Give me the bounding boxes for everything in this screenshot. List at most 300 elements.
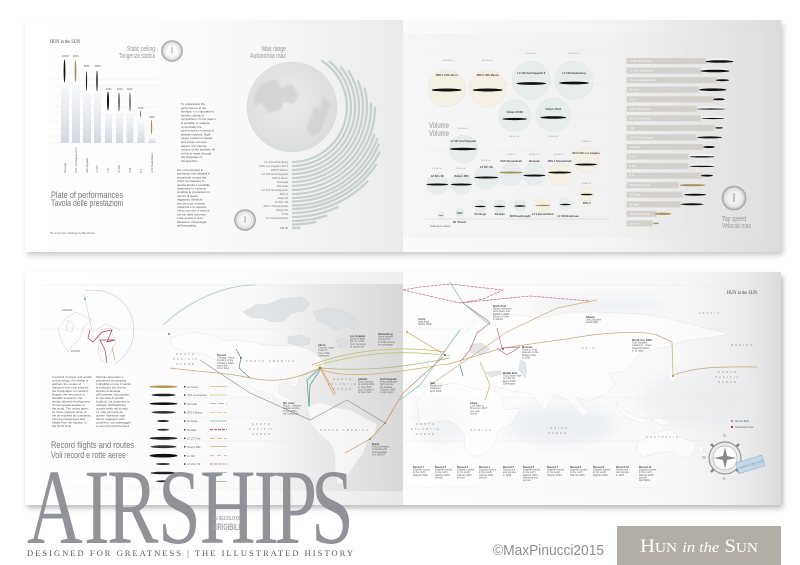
- map captions: in ten days: [217, 367, 230, 370]
- ocean and continent labels: ATLANTIC: [328, 382, 358, 386]
- bottom row of captions: Record 9: [593, 465, 605, 469]
- heading: volume: Volume: [429, 121, 449, 130]
- chart: volume bubbles: LZ 127 Graf Zeppelin: [450, 139, 477, 143]
- bar chart: static ceiling: 6000: [127, 88, 133, 91]
- land: Europe and Asia: [405, 312, 729, 417]
- text block: introduction: dell'infografica.: [177, 224, 197, 228]
- ocean and continent labels: ARCTIC: [699, 311, 721, 315]
- heading: max range: Autonomia max: [250, 53, 286, 60]
- chart: max range arcs around globe: SM 96: [280, 226, 288, 230]
- text block: introduction: interno delle aeronavi.: [177, 212, 207, 216]
- heading: max range: [250, 46, 286, 60]
- land: South America: [307, 402, 377, 484]
- chart: volume bubbles: 105,000 m³: [457, 127, 469, 130]
- heading: record flights and routes: Voli record e rotte aeree: [51, 450, 126, 461]
- bar chart: static ceiling: 8000: [95, 65, 101, 68]
- chart: volume bubbles: LZ 129 Hindenburg: [562, 71, 586, 75]
- map captions: by airship R34: [358, 383, 375, 386]
- text block: introduction: altitude reached, flight: [181, 132, 211, 136]
- bottom row of captions: in the south: [457, 471, 471, 474]
- heading: volume: Volume: [429, 129, 449, 138]
- text block: introduction: massima e un aspetto: [177, 205, 207, 209]
- ocean and continent labels: ATLANTIC: [411, 427, 441, 431]
- heading: static ceiling: [119, 46, 155, 60]
- ocean and continent labels: INDIAN: [547, 426, 569, 430]
- text block: record flights intro: dreadful accidents, the: [52, 396, 83, 400]
- legend: airships and routes: [150, 385, 227, 482]
- bar chart: static ceiling: L 59: [107, 168, 110, 173]
- chart: volume bubbles: 60,000 m³: [554, 153, 564, 156]
- text block: introduction: percorrenza, velocità: [177, 201, 205, 205]
- map captions: ten crossings: [378, 343, 393, 346]
- logo: Hun in the Sun on map: HUN in the SUN: [727, 290, 757, 296]
- heading: record flights and routes: [51, 440, 134, 461]
- map captions: Coast to coast: [318, 347, 334, 350]
- map captions: First passenger: [380, 381, 397, 384]
- chart: top speed bars: R 34: [629, 174, 635, 178]
- bar chart: static ceiling: R 34: [129, 167, 132, 173]
- text block: record flights intro: la memoria di terribili: [96, 396, 124, 400]
- chart: volume bubbles: 70,000 m³: [581, 140, 591, 143]
- bottom row of captions: Zeppelin routes: [435, 469, 453, 472]
- legend: airships and routes: N4 Italia: [187, 429, 197, 432]
- bottom row of captions: Atlantic 1930: [457, 474, 472, 477]
- bottom row of captions: Record 8: [570, 465, 582, 469]
- icon: range dial: [234, 210, 256, 230]
- chart: max range arcs around globe: LZ 4 Deutschland: [266, 216, 288, 220]
- map captions: round trip: [217, 364, 228, 367]
- map captions: World tour 1929: [632, 338, 652, 342]
- panel: bottom spread, world map: [25, 272, 783, 508]
- map captions: from Scotland: [358, 388, 374, 391]
- bottom row of captions: in the north: [523, 471, 536, 474]
- map captions: First crossing: [358, 381, 373, 384]
- chart: max range arcs around globe: ZRS 5 Macon: [271, 168, 288, 172]
- polar inset map: CANADA: [62, 309, 73, 312]
- chart: top speed bars: ZPG-3: [629, 97, 637, 101]
- map captions: Moscow: [522, 345, 533, 349]
- map captions: line 1931-37: [372, 453, 386, 456]
- bottom row of captions: Record 6: [523, 465, 535, 469]
- map captions: Cardington: [503, 382, 516, 385]
- chart: top speed bars: USS Los Angeles ZR-3: [629, 78, 656, 82]
- text block: introduction: importante trovare dei: [177, 175, 207, 179]
- map captions: Italy: [430, 381, 436, 385]
- bottom row of captions: [413, 465, 657, 482]
- ocean and continent labels: NORTH: [176, 352, 196, 356]
- text block: record flights intro: transport that most inspired: [52, 386, 89, 390]
- chart: volume bubbles: 19,000 m³: [581, 182, 591, 185]
- text block: record flights intro: grandezza tecnologica,: [96, 378, 127, 382]
- map captions: Record: [217, 353, 226, 357]
- map captions: in July 1919: [358, 386, 372, 389]
- bar chart: static ceiling: 10000: [62, 55, 70, 58]
- chart: volume bubbles: 155,000 m³: [508, 135, 520, 138]
- chart: volume bubbles: 156,000 m³: [547, 135, 559, 138]
- ocean and continent labels: NORTH: [333, 377, 353, 381]
- map captions: in Alaska: [493, 318, 504, 321]
- chart: volume bubbles: [425, 50, 610, 228]
- chart: max range arcs around globe: R 34: [282, 212, 288, 216]
- map captions: record: [470, 412, 478, 415]
- chart: top speed bars: R 101: [629, 154, 636, 158]
- map captions: Egypt 1930: [503, 380, 516, 383]
- text block: introduction: and a less common: [181, 140, 207, 144]
- bottom row of captions: service: [479, 476, 488, 479]
- bar chart: static ceiling: 4000: [138, 107, 144, 110]
- tagline: DESIGNED FOR GREATNESS | THE ILLUSTRATED HISTORY: [27, 548, 353, 558]
- text block: record flights intro: of commercial aviation in: [52, 403, 85, 407]
- chart: volume bubbles: LZ 59 L 59: [480, 165, 493, 169]
- text block: introduction: prestazioni dei dirigibili è: [177, 172, 210, 176]
- text block: record flights intro: e merci fino al Polo Nord.: [96, 424, 130, 428]
- title: AIRSHIPS: AIRSHIPS: [27, 449, 354, 565]
- chart: top speed bars: ZRS 5 USS Macon: [629, 116, 651, 120]
- land: Africa: [417, 383, 521, 456]
- map captions: ZR-3 in 1924: [350, 340, 365, 343]
- map captions: continent 1925: [217, 362, 234, 365]
- polar inset map: [58, 290, 134, 364]
- text block: introduction: identify criteria of: [181, 113, 204, 117]
- subtitle: un secolo di dirigibili: UN SECOLO DI: [212, 516, 240, 522]
- map captions: to New York: [358, 391, 372, 394]
- bottom row of captions: in 1937: [616, 474, 625, 477]
- text block: record flights intro: commerciale nel mondo.: [96, 406, 129, 410]
- heading: static ceiling: Static ceiling: [127, 46, 155, 53]
- text block: record flights intro: dell'umanità. Nonostante: [96, 392, 129, 396]
- chart: volume bubbles: ZRS-5 USS Macon: [476, 73, 499, 77]
- map captions: Amundsen and: [493, 310, 510, 313]
- ocean and continent labels: BERING: [731, 343, 755, 347]
- bottom row of captions: Zeppelin routes: [639, 469, 657, 472]
- bar chart: static ceiling: LZ 127: [96, 165, 99, 173]
- chart: top speed bars: LZ 129 Hindenburg: [629, 59, 652, 63]
- map captions: Khartoum 1917: [470, 407, 488, 410]
- map captions: Chicago - Akron: [217, 357, 235, 360]
- text block: record flights intro: A symbol of power and wealth: [52, 375, 92, 379]
- ocean and continent labels: PACIFIC: [715, 375, 741, 379]
- text block: introduction: attraverso il linguaggio: [177, 220, 207, 224]
- bottom row of captions: in the south: [547, 471, 561, 474]
- heading: static ceiling: Tangenza statica: [119, 53, 155, 60]
- map captions: to India via: [503, 377, 516, 380]
- ocean and continent labels: [173, 311, 755, 439]
- chart: volume bubbles: 70,000 m³: [506, 153, 516, 156]
- text block: introduction: To understand the: [181, 102, 205, 106]
- map captions: in 1930: [522, 356, 531, 359]
- bottom row of captions: Record 3: [457, 465, 469, 469]
- map captions: April 1926: [430, 390, 442, 393]
- map captions: North Atlantic: [378, 336, 394, 339]
- map captions: Hindenburg: [378, 332, 393, 336]
- logo box: Hun in the Sun: HUN in the SUN: [640, 536, 758, 557]
- map captions: in 1936 service: [378, 341, 395, 344]
- legend: airships and routes: LZ 104 L 59: [187, 463, 201, 466]
- ocean and continent labels: NORTH: [718, 370, 738, 374]
- bottom row of captions: in the south: [479, 471, 493, 474]
- bottom row of captions: Zeppelin routes: [593, 469, 611, 472]
- ocean and continent labels: AFRICA: [471, 428, 493, 432]
- chart: volume bubbles: 184,000 m³: [481, 59, 493, 62]
- text block: introduction: termini di quota: [177, 194, 198, 198]
- text block: record flights intro: airship allowed development: [52, 400, 90, 404]
- bottom row of captions: Record 1: [413, 465, 425, 469]
- text block: introduction: raggiunta, distanza: [177, 198, 203, 202]
- text block: record flights intro: the air reached all continents,: [52, 414, 91, 418]
- bottom row of captions: Atlantic 1934: [547, 474, 562, 477]
- map captions: the Atlantic: [380, 386, 393, 389]
- text block: introduction: Tutto questo è reso: [177, 216, 203, 220]
- map captions: Akron: [318, 343, 326, 347]
- flight routes: [163, 282, 757, 453]
- bar chart: static ceiling: 6000: [117, 88, 123, 91]
- land: arctic Canada and Greenland: [243, 297, 310, 322]
- chart: volume bubbles: ZRS-1 Shenandoah: [548, 159, 572, 163]
- text block: record flights intro: freight from the equator to: [52, 420, 87, 424]
- text block: record flights intro: by these majestic ships of: [52, 410, 87, 414]
- icon: altimeter dial: [162, 40, 182, 62]
- map captions: Graf Zeppelin: [632, 342, 648, 345]
- chart: volume bubbles: USS Shenandoah: [500, 159, 522, 163]
- map captions: Brazil: [372, 442, 379, 446]
- map captions: in the 1930s: [283, 410, 297, 413]
- text block: record flights intro: incidenti, ha consentito lo: [96, 400, 130, 404]
- map captions: crossing of the: [217, 359, 234, 362]
- heading: top speed: Top speed: [722, 216, 746, 223]
- map captions: Siberia: [586, 315, 595, 319]
- bottom row of captions: Record 5: [503, 465, 515, 469]
- bottom row of captions: Atlantic 1938: [639, 474, 654, 477]
- map captions: Friedrichshafen: [632, 347, 650, 350]
- map captions: in 21 days: [632, 349, 644, 352]
- map captions: L 59 flight to: [470, 405, 484, 408]
- text block: introduction: synoptically the: [181, 125, 202, 129]
- map captions: regular line: [378, 338, 391, 341]
- map legend: [731, 420, 754, 429]
- text block: record flights intro: il dirigibile è forse il mezzo: [96, 382, 131, 386]
- ocean and continent labels: ASIA: [582, 346, 596, 350]
- bottom row of captions: Record 2: [435, 465, 447, 469]
- bottom row of captions: Atlantic 1928: [413, 474, 428, 477]
- map captions: Graf Zeppelin: [372, 451, 388, 454]
- legend: airships and routes: N1 Norge: [187, 420, 198, 423]
- chart: volume bubbles: N4 Italia: [495, 212, 505, 216]
- map captions: Flight by Graf: [522, 349, 537, 352]
- chart: max range arcs around globe: LZ 130 Graf Zeppelin: [262, 172, 288, 176]
- text block: introduction: Per comprendere le: [177, 168, 204, 172]
- bottom row of captions: service: [639, 476, 648, 479]
- heading: record flights and routes: Record flights and routes: [51, 440, 134, 451]
- ocean and continent labels: SOUTH AMERICA: [320, 428, 370, 432]
- ocean and continent labels: OCEAN: [333, 387, 353, 391]
- map captions: Ciampino: [430, 387, 441, 390]
- credit line: Hun in the Sun / Drawings by Max Pinucci: [50, 232, 95, 235]
- icon: compass with blue stamp: W: [702, 455, 706, 460]
- bar chart: static ceiling: N 1: [140, 168, 143, 173]
- chart: top speed bars: LZ 127 Graf Zeppelin: [629, 135, 654, 139]
- chart: volume bubbles: 200,000 m³: [568, 52, 580, 55]
- text block: record flights intro: Le rotte percorse da: [96, 410, 123, 414]
- ocean and continent labels: OCEAN: [176, 362, 196, 366]
- bar chart: static ceiling: [50, 55, 160, 173]
- map captions: flight across: [380, 383, 394, 386]
- map captions: Rome to Teller: [493, 315, 509, 318]
- chart: max range arcs around globe: Dixmude: [277, 184, 288, 188]
- icon: speed dial: [722, 186, 746, 210]
- icon: compass with blue stamp: N: [723, 433, 726, 438]
- chart: top speed bars: Norvegia: [629, 145, 640, 149]
- text block: introduction: volume of the airships. All: [181, 148, 215, 152]
- map captions: regular service: [283, 407, 300, 410]
- ocean and continent labels: OCEAN: [416, 432, 436, 436]
- land: Australia and islands: [637, 430, 697, 457]
- chart: volume bubbles: 184,000 m³: [442, 59, 454, 62]
- bottom row of captions: Zeppelin routes: [479, 469, 497, 472]
- heading: plate of performances: Tavola delle prestazioni: [51, 198, 123, 209]
- chart: volume bubbles: Vickers R101: [545, 107, 562, 111]
- chart: top speed bars: LZ 4 Deutschland: [629, 212, 650, 216]
- legend: airships and routes: USS Los Angeles: [187, 394, 207, 397]
- map captions: Delivery flight: [350, 338, 365, 341]
- map captions: Africa: [470, 401, 478, 405]
- chart: volume bubbles: LZ 4 Deutschland: [532, 212, 554, 216]
- chart: volume bubbles: 200,000 m³: [525, 52, 537, 55]
- land: North America: [170, 332, 326, 408]
- bottom row of captions: and service: [616, 471, 629, 474]
- bar chart: static ceiling: 6000: [106, 88, 112, 91]
- bottom row of captions: in the north: [639, 471, 652, 474]
- text block: introduction: criteri comparativi. In: [177, 179, 205, 183]
- text block: record flights intro: hanno raggiunto tutti i: [96, 417, 125, 421]
- chart: volume bubbles: ZPG-3: [583, 201, 591, 205]
- chart: volume bubbles: ZRS-4 USS Akron: [436, 73, 458, 77]
- text block: introduction: the language of: [181, 155, 202, 159]
- bottom row of captions: Zeppelin routes: [547, 469, 565, 472]
- bottom row of captions: Airship line: [503, 469, 516, 472]
- bottom row of captions: Atlantic 1931: [479, 474, 494, 477]
- chart: max range arcs around globe: ZPG-3: [280, 192, 288, 196]
- text block: introduction: analizzare in maniera: [177, 186, 206, 190]
- bar chart: static ceiling: LZ 4 Deutschland: [151, 153, 154, 173]
- text block: introduction: performance of the: [181, 106, 207, 110]
- logo box: Hun in the Sun: [617, 526, 781, 565]
- legend: airships and routes: Dixmude: [187, 403, 197, 406]
- map captions: Norge from: [430, 385, 443, 388]
- text block: record flights intro: Despite the memories of: [52, 392, 85, 396]
- map captions: R101 flight route: [503, 375, 522, 378]
- chart: volume bubbles: LZ 130 Graf Zeppelin II: [517, 71, 545, 75]
- map captions: Lakehurst: [318, 354, 329, 357]
- text block: introduction: of this is made through: [181, 151, 212, 155]
- chart: volume bubbles: Dixmude: [529, 159, 540, 163]
- map captions: non-stop: [470, 410, 480, 413]
- world map base: [40, 285, 764, 488]
- text block: record flights intro: queste maestose navi: [96, 414, 126, 418]
- heading: volume: [429, 121, 449, 138]
- chart: volume bubbles: Vickers R100: [507, 110, 523, 114]
- bar chart: static ceiling: Graf Zeppelin: [86, 157, 89, 173]
- map captions: Zeppelin to the: [522, 351, 539, 354]
- bar chart: static ceiling: 9000: [73, 55, 79, 58]
- chart: top speed bars: LZ 130 Graf Zeppelin: [629, 69, 654, 73]
- heading: plate of performances: [51, 190, 123, 209]
- chart: volume bubbles: 55,000 m³: [432, 167, 442, 170]
- chart: top speed bars: L 59: [629, 126, 635, 130]
- text block: record flights intro: ispirato la fantasia: [96, 389, 121, 393]
- chart: volume bubbles: 68,000 m³: [529, 153, 539, 156]
- bottom row of captions: Zeppelin routes: [523, 469, 541, 472]
- chart: top speed bars: USS Shenandoah: [629, 183, 650, 187]
- bar chart: static ceiling: 2000: [149, 116, 155, 119]
- chart: volume bubbles: 68,000 m³: [481, 159, 491, 162]
- bottom row of captions: Atlantic 1936: [593, 474, 608, 477]
- map captions: Italia flight: [418, 321, 430, 324]
- bottom row of captions: in the north: [435, 471, 448, 474]
- map captions: Soviet Union: [522, 354, 537, 357]
- map captions: Rio route: [283, 401, 295, 405]
- bottom row of captions: Record 11: [639, 465, 652, 469]
- ocean and continent labels: OCEAN: [718, 380, 738, 384]
- heading: max range: Max range: [262, 46, 286, 53]
- map captions: Los Angeles: [350, 334, 366, 338]
- bottom row of captions: Record 7: [547, 465, 559, 469]
- chart: volume bubbles: LZ 129 Bodensee: [557, 214, 579, 218]
- map legend: Record flight: [735, 420, 749, 423]
- chart: max range arcs around globe: LZ 59 L 59: [275, 200, 288, 204]
- chart: volume bubbles: ZR-3 USS Los Angeles: [572, 151, 600, 155]
- chart: max range arcs around globe: USS Los Angeles ZR-3: [259, 164, 288, 168]
- map captions: North Pole: [493, 304, 507, 308]
- map captions: world flight: [586, 321, 598, 324]
- bottom row of captions: Record 4: [479, 465, 491, 469]
- bottom row of captions: service: [457, 476, 466, 479]
- ocean and continent labels: OCEAN: [548, 431, 568, 435]
- map captions: October 1928: [380, 388, 396, 391]
- map captions: [217, 304, 652, 456]
- ocean and continent labels: AUSTRALIA: [646, 435, 680, 439]
- map captions: Recife - Havana: [283, 405, 302, 408]
- legend: airships and routes: ZRS-5 Macon: [187, 411, 203, 414]
- icon: compass with blue stamp: S: [723, 476, 725, 481]
- map captions: via Caribbean: [283, 412, 299, 415]
- logo: Hun in the Sun small: HUN in the SUN: [50, 39, 80, 45]
- chart: volume bubbles: SM Dreadnought: [510, 214, 531, 218]
- ocean and continent labels: SOUTH: [252, 422, 272, 426]
- bar chart: static ceiling: USS Los Angeles ZR-3: [75, 147, 78, 173]
- heading: top speed: Velocità max: [722, 223, 751, 230]
- heading: top speed: [722, 216, 751, 230]
- copyright: ©MaxPinucci2015: [493, 542, 604, 559]
- chart: max range arcs around globe: [247, 60, 380, 230]
- map captions: to Lakehurst: [350, 345, 364, 348]
- bottom row of captions: Hamburg line: [523, 476, 538, 479]
- chart: max range arcs around globe: ZRS 4 Akron: [272, 176, 288, 180]
- legend: airships and routes: Vickers R34: [187, 446, 201, 449]
- map captions: Middle East: [503, 371, 518, 375]
- bar chart: static ceiling: 8000: [84, 65, 90, 68]
- bottom row of captions: in the south: [593, 471, 607, 474]
- subtitle: un secolo di dirigibili: [212, 516, 240, 532]
- icon: compass with blue stamp: HUN in the SUN: [739, 459, 765, 470]
- chart: max range arcs around globe: LZ 129 Hindenburg: [264, 160, 288, 164]
- map captions: from Germany: [350, 343, 367, 346]
- text block: record flights intro: di trasporto che più ha: [96, 386, 126, 390]
- chart: volume bubbles: LZ 62 L 30: [431, 174, 444, 178]
- text block: introduction: comparison. In this plate it: [181, 117, 216, 121]
- chart: max range arcs around globe: Italia N4: [278, 196, 288, 200]
- ocean and continent labels: PACIFIC: [173, 357, 199, 361]
- map captions: to Recife with: [372, 448, 388, 451]
